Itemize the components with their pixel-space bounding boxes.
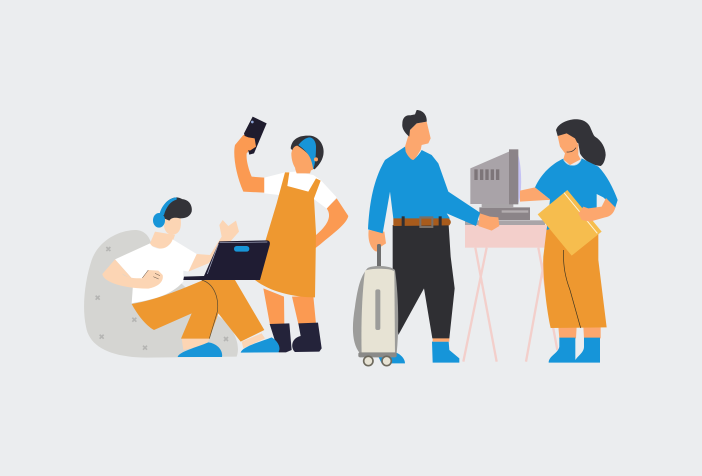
belt bbox=[393, 218, 451, 226]
phone bbox=[244, 117, 267, 155]
woman with folder bbox=[520, 119, 618, 363]
pants bbox=[132, 280, 264, 342]
left hand bbox=[368, 230, 386, 252]
feet ankles bbox=[182, 333, 265, 350]
dress bbox=[255, 172, 321, 297]
blouse bbox=[535, 158, 618, 230]
shoes bbox=[178, 337, 279, 357]
group: left figures bbox=[84, 117, 348, 358]
bean bag bbox=[84, 230, 238, 358]
boots bbox=[270, 323, 322, 352]
shirt bbox=[368, 147, 480, 233]
hair bbox=[291, 136, 324, 169]
arm to computer bbox=[520, 187, 551, 202]
legs bbox=[558, 327, 601, 338]
left arm bbox=[102, 259, 163, 289]
raised arm bbox=[234, 134, 264, 193]
table bbox=[463, 220, 557, 362]
other arm bbox=[305, 198, 348, 254]
head and neck bbox=[405, 122, 431, 162]
headphones bbox=[153, 197, 177, 228]
boy with laptop bbox=[102, 197, 279, 357]
hair bbox=[161, 197, 192, 221]
suitcase bbox=[353, 244, 398, 366]
trousers bbox=[543, 228, 607, 328]
girl with phone bbox=[234, 117, 348, 352]
face bbox=[291, 146, 313, 171]
neck bbox=[295, 168, 312, 173]
legs bbox=[263, 288, 316, 325]
headband bbox=[298, 137, 316, 169]
computer bbox=[470, 149, 530, 220]
neck bbox=[149, 232, 175, 250]
hair bbox=[402, 110, 427, 137]
neck and face bbox=[558, 133, 581, 165]
trousers bbox=[393, 225, 455, 338]
head bbox=[164, 214, 181, 235]
ankle bbox=[433, 335, 449, 342]
hand on folder bbox=[578, 198, 615, 222]
group: right figures bbox=[353, 110, 618, 366]
raised hand bbox=[188, 220, 239, 272]
shirt bbox=[264, 172, 337, 209]
folder bbox=[538, 190, 602, 256]
right hand bbox=[478, 213, 499, 231]
hair bbox=[556, 119, 606, 166]
shirt bbox=[115, 239, 197, 303]
fingers bbox=[237, 135, 256, 151]
man with suitcase bbox=[368, 110, 499, 363]
shoes bbox=[378, 342, 459, 363]
boots bbox=[549, 338, 600, 363]
laptop bbox=[183, 240, 270, 280]
